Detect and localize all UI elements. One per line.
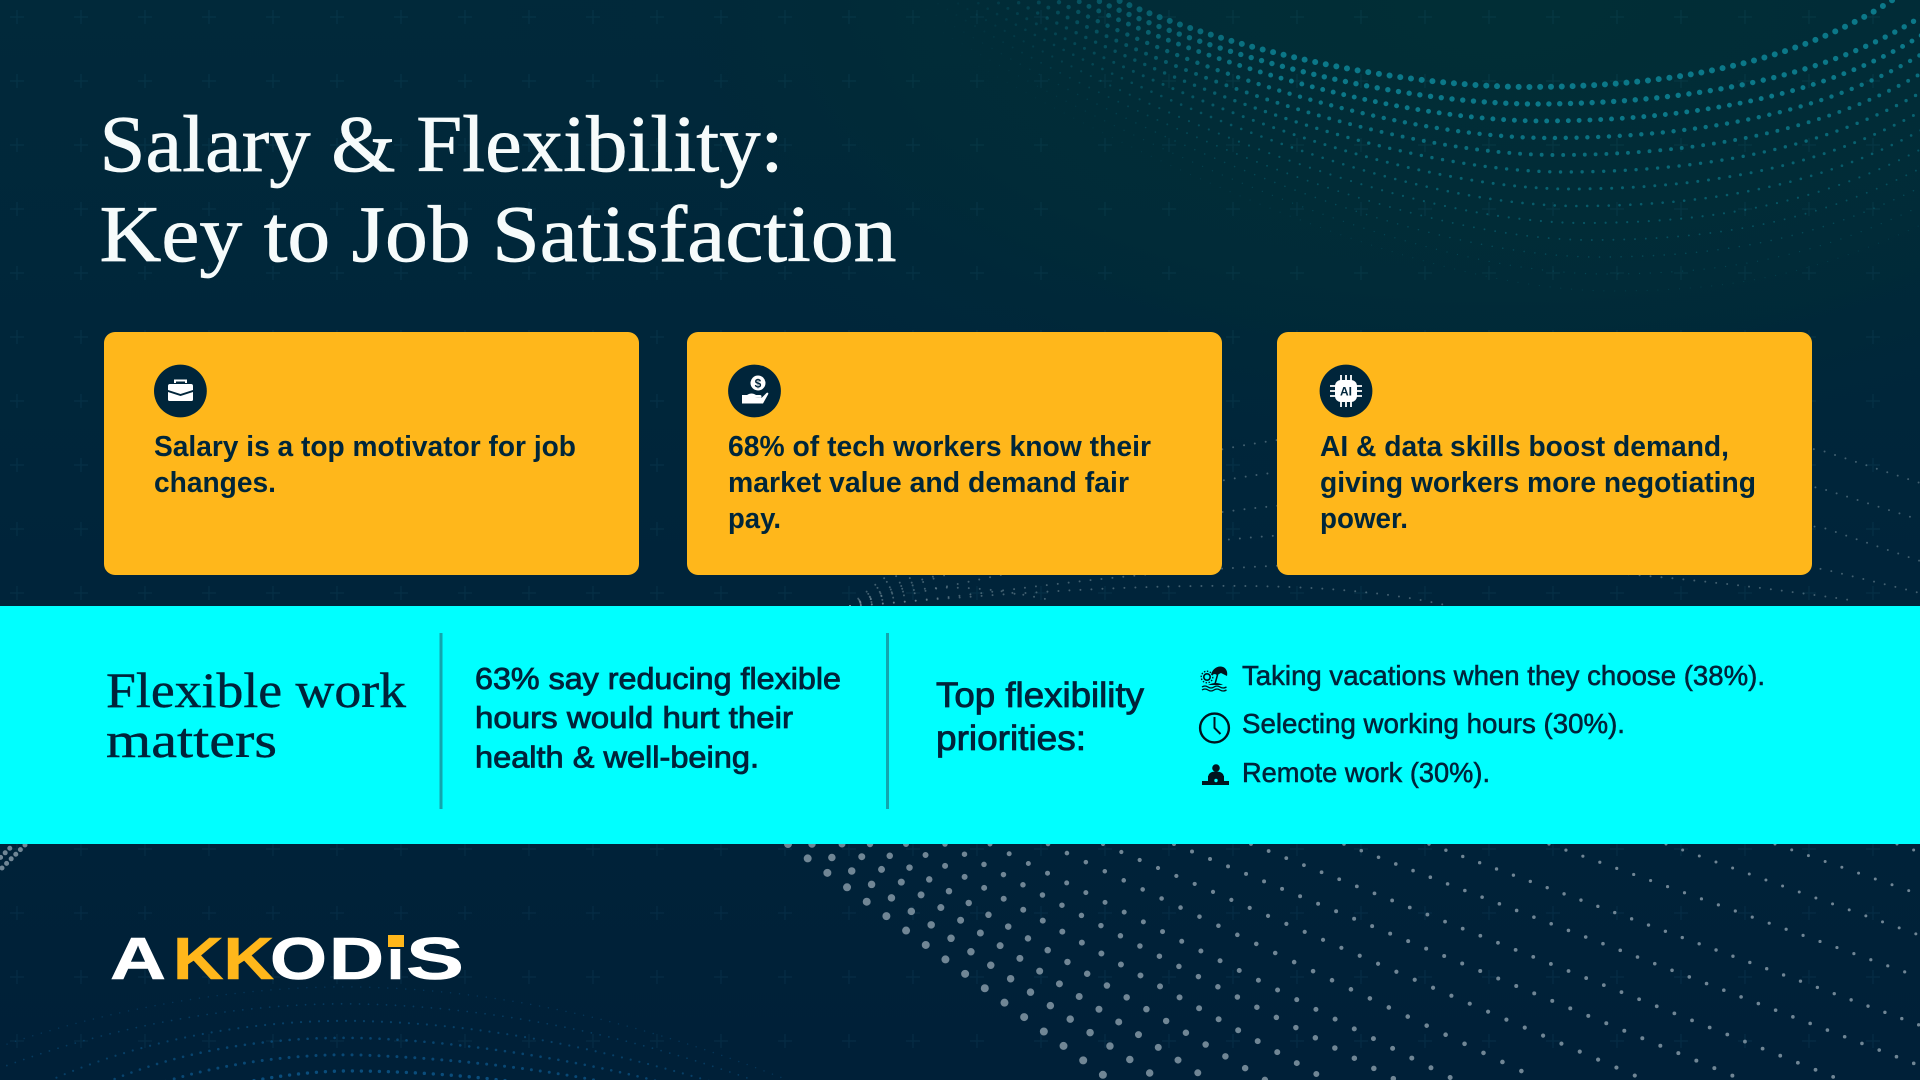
logo: Akkodis: KK (173, 926, 274, 992)
text: working hours: Selecting working hours (30%). (1242, 708, 1625, 739)
background: bottom-left blue dot arcs (0, 987, 800, 1080)
icon: AI chip (1320, 365, 1372, 417)
text: salary motivator: changes. (154, 467, 276, 499)
text: AI and data skills: power. (1320, 503, 1408, 535)
background: bottom-right grey dot field (0, 844, 1920, 1080)
text: AI and data skills: giving workers more negotiating (1320, 467, 1756, 499)
text: 63 percent statistic: health & well-being. (475, 740, 759, 774)
text: market value: pay. (728, 503, 781, 535)
icon: briefcase (154, 365, 207, 417)
logo: Akkodis: D (329, 926, 384, 992)
text: market value (728, 431, 1151, 535)
heading: flexible work matters: matters (106, 712, 277, 768)
text: remote work: Remote work (30%). (1242, 757, 1490, 788)
icon: AI chip: AI (1340, 384, 1352, 398)
background: middle grey dot mound (850, 426, 1920, 606)
panel: salary motivator card (104, 332, 639, 575)
heading: top flexibility priorities (936, 676, 1145, 758)
text: salary motivator: Salary is a top motivator for job (154, 431, 576, 463)
icon: hand with coin (728, 365, 781, 417)
logo: Akkodis: A (110, 926, 166, 992)
text: vacations: Taking vacations when they choose (38%). (1242, 660, 1765, 691)
title: Salary & Flexibility: (100, 101, 784, 189)
icon: clock (1200, 714, 1229, 742)
icon: beach umbrella (1201, 666, 1227, 691)
text: AI and data skills (1320, 431, 1756, 535)
text: market value: 68% of tech workers know their (728, 431, 1151, 463)
heading: flexible work matters: Flexible work (106, 662, 406, 718)
text: market value: market value and demand fair (728, 467, 1129, 499)
list: flexibility priorities (1200, 660, 1765, 788)
panel: market value card (687, 332, 1222, 575)
icon: hand with coin: $ (755, 376, 762, 390)
text: 63 percent statistic: hours would hurt their (475, 700, 793, 735)
background: top-right dot wave (860, 0, 1920, 291)
logo: Akkodis: I (387, 926, 404, 992)
logo: Akkodis: S (406, 926, 464, 992)
heading: top flexibility priorities: priorities: (936, 719, 1086, 758)
panel: flexible work band (0, 606, 1920, 844)
text: AI and data skills: AI & data skills boost demand, (1320, 431, 1729, 463)
title (100, 101, 897, 279)
text: 63 percent statistic (475, 661, 841, 774)
title: Key to Job Satisfaction (100, 191, 897, 279)
text: 63 percent statistic: 63% say reducing flexible (475, 661, 841, 696)
logo: Akkodis (110, 926, 464, 992)
panel: AI and data skills card (1277, 332, 1812, 575)
heading: top flexibility priorities: Top flexibility (936, 676, 1145, 715)
icon: remote worker at laptop (1202, 764, 1229, 785)
heading: flexible work matters (106, 662, 406, 768)
logo: Akkodis: O (270, 926, 327, 992)
text: salary motivator (154, 431, 576, 499)
